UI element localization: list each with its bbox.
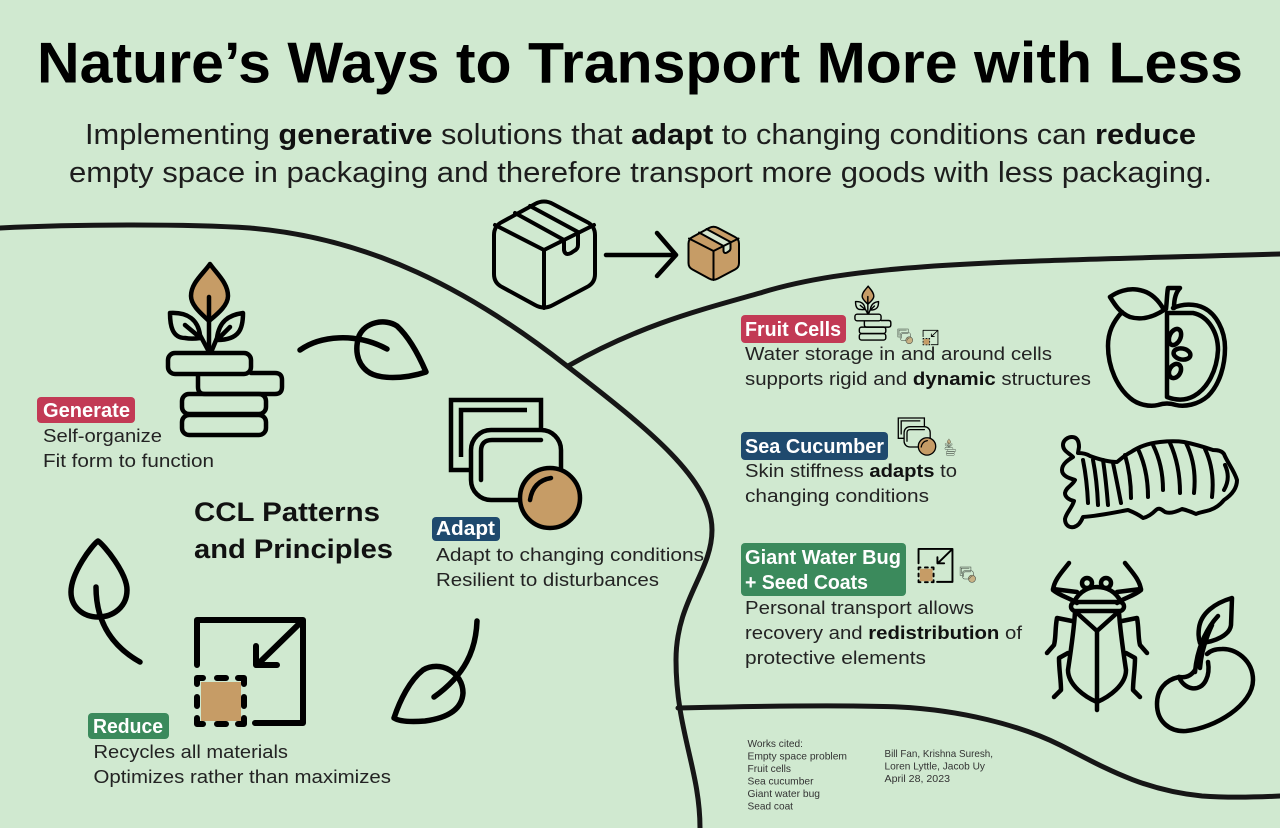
- label: Reduce: Optimizes rather than maximizes: [94, 766, 391, 787]
- icon: large box: [494, 202, 595, 308]
- works cited: Giant water bug: [748, 788, 820, 800]
- works cited: Fruit cells: [748, 763, 791, 775]
- panel: sea cucumber: [741, 432, 957, 506]
- subtitle: [69, 119, 1212, 189]
- subtitle: Implementing generative solutions that adapt to changing conditions can reduce: [85, 119, 1196, 151]
- label: Reduce: [88, 713, 391, 787]
- icon: giant water bug: [1047, 563, 1147, 710]
- label: Adapt: Resilient to disturbances: [436, 569, 659, 590]
- panel: sea cucumber: Skin stiffness adapts to: [745, 460, 957, 481]
- panel: giant water bug and seed coats: Giant Water Bug: [745, 547, 901, 569]
- title: Nature’s Ways to Transport More with Less: [37, 32, 1243, 96]
- authors and date: Bill Fan, Krishna Suresh,: [884, 748, 993, 760]
- heading: CCL patterns: and Principles: [194, 534, 393, 564]
- label: Reduce: Reduce: [93, 716, 163, 738]
- icon: reduce square: [197, 620, 303, 724]
- icon: adapt layers: [451, 400, 580, 528]
- authors and date: Loren Lyttle, Jacob Uy: [884, 760, 986, 772]
- works cited: Sead coat: [748, 800, 793, 812]
- label: Adapt: Adapt: [436, 518, 495, 540]
- icon: mini reduce large: [919, 549, 952, 582]
- panel: fruit cells: supports rigid and dynamic structures: [745, 368, 1091, 389]
- panel: fruit cells: Water storage in and around cells: [745, 343, 1052, 364]
- authors and date: April 28, 2023: [884, 773, 950, 785]
- label: Adapt: Adapt to changing conditions: [436, 544, 704, 565]
- label: Generate: Self-organize: [43, 425, 162, 446]
- panel: giant water bug and seed coats: Personal transport allows: [745, 597, 974, 618]
- icon: leaf lower left: [71, 541, 140, 662]
- right dividing curve: [568, 254, 1280, 366]
- panel: giant water bug and seed coats: protective elements: [745, 647, 926, 668]
- works cited: Empty space problem: [748, 750, 847, 762]
- icon: mini adapt small: [960, 567, 976, 582]
- panel: sea cucumber: changing conditions: [745, 485, 929, 506]
- label: Generate: Generate: [43, 400, 130, 422]
- icon: plant on stones: [168, 264, 282, 435]
- works cited: Works cited:: [748, 738, 803, 750]
- panel: giant water bug and seed coats: + Seed Coats: [745, 572, 868, 594]
- subtitle: empty space in packaging and therefore transport more goods with less packaging.: [69, 157, 1212, 189]
- heading: CCL patterns: [194, 497, 393, 564]
- panel: sea cucumber: Sea Cucumber: [745, 436, 884, 458]
- label: Adapt: [432, 517, 704, 590]
- icon: mini adapt large: [898, 418, 936, 455]
- bottom dividing curve: [678, 706, 1280, 797]
- panel: giant water bug and seed coats: [741, 543, 1023, 668]
- icon: seed: [1157, 598, 1253, 731]
- panel: giant water bug and seed coats: recovery and redistribution of: [745, 622, 1023, 643]
- panel: fruit cells: [741, 315, 1091, 389]
- works cited: Sea cucumber: [748, 776, 814, 788]
- works cited: [748, 738, 847, 812]
- icon: leaf right of plant: [300, 322, 426, 378]
- label: Reduce: Recycles all materials: [94, 741, 288, 762]
- label: Generate: Fit form to function: [43, 450, 214, 471]
- main dividing curve: [0, 225, 712, 828]
- panel: fruit cells: Fruit Cells: [745, 319, 841, 341]
- icon: mini adapt: [898, 329, 913, 344]
- icon: sea cucumber: [1062, 437, 1237, 527]
- icon: small tan box: [688, 226, 739, 280]
- icon: leaf lower right: [394, 621, 477, 722]
- icon: mini plant small: [945, 439, 956, 455]
- authors and date: [884, 748, 993, 785]
- icon: apple: [1108, 288, 1225, 406]
- heading: CCL patterns: CCL Patterns: [194, 497, 380, 527]
- icon: mini reduce: [923, 330, 938, 345]
- arrow: large box to small box: [606, 233, 676, 276]
- icon: mini plant: [855, 286, 891, 340]
- label: Generate: [37, 397, 214, 471]
